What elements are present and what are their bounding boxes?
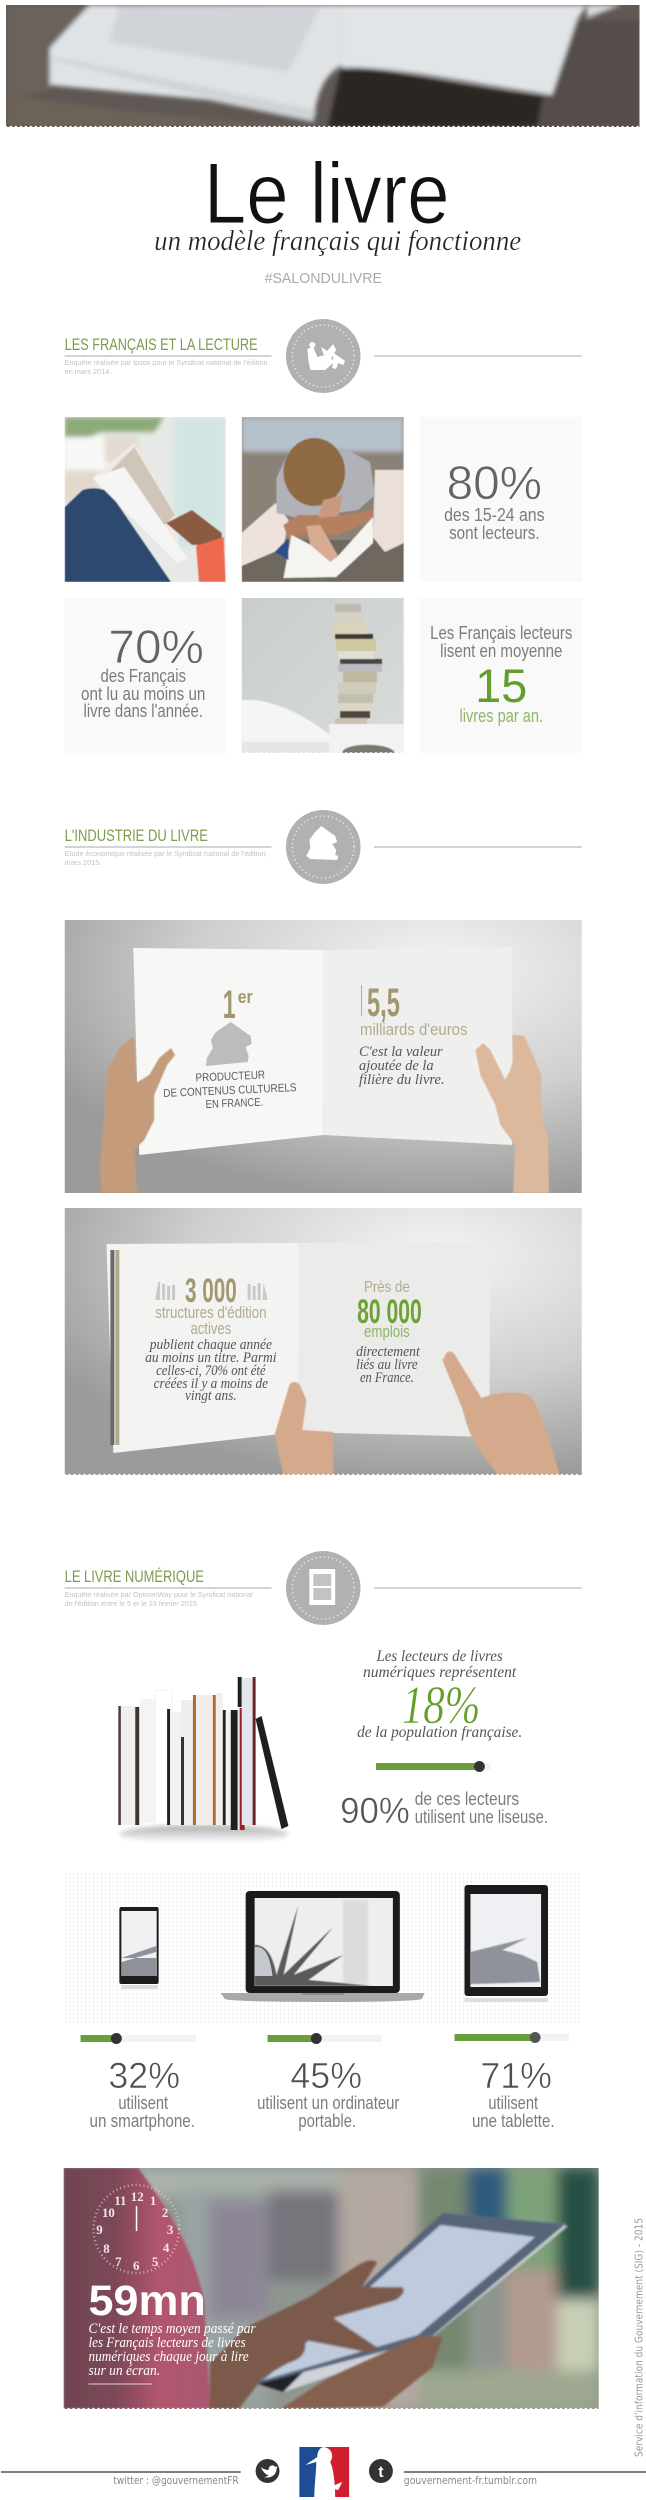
clock bbox=[93, 2185, 179, 2273]
stat: 1er: 1 bbox=[223, 983, 236, 1027]
stat panel: 70%: des Français bbox=[100, 666, 186, 686]
section heading: les Français et la lecture bbox=[65, 335, 582, 376]
text: 18% of French population: numériques représentent bbox=[363, 1664, 517, 1681]
stat: 3000 structures bbox=[155, 1282, 175, 1300]
clock: 9 bbox=[96, 2222, 103, 2237]
icon: tablet bbox=[464, 1885, 548, 2002]
stat panel: 70%: 70% bbox=[108, 621, 204, 673]
stat panel: 70%: livre dans l'année. bbox=[84, 701, 203, 721]
stat panel: 80% bbox=[420, 417, 582, 582]
section heading: l'industrie du livre: L'INDUSTRIE DU LIVRE bbox=[65, 826, 208, 845]
header photo: open book bbox=[6, 5, 640, 127]
photo: hands holding book, second spread: structures d'édition bbox=[155, 1303, 267, 1322]
panel: devices bbox=[65, 1873, 582, 2023]
clock: 5 bbox=[152, 2254, 158, 2269]
text: 90% use an e-reader: de ces lecteurs bbox=[415, 1789, 519, 1809]
bar and stat: 71% tablet: utilisent bbox=[488, 2093, 538, 2113]
footer: twitter bbox=[1, 2459, 279, 2487]
photo: hands holding book, second spread: actives bbox=[190, 1319, 231, 1338]
section heading: l'industrie du livre: mars 2015. bbox=[65, 858, 101, 867]
photo: hands on a tablet with 59mn callout bbox=[64, 2168, 599, 2409]
clock: 10 bbox=[102, 2205, 115, 2220]
section heading: le livre numérique: Enquête réalisée par OpinionWay pour le Syndicat national bbox=[65, 1590, 253, 1599]
section heading: l'industrie du livre: Etude économique réalisée par le Syndicat national de l'édition, bbox=[65, 849, 268, 858]
section heading: le livre numérique: de l'édition entre le 5 et le 23 février 2015. bbox=[65, 1599, 199, 1608]
bar and stat: 71% tablet: une tablette. bbox=[472, 2111, 554, 2131]
section heading: le livre numérique bbox=[65, 1567, 582, 1608]
footer: tumblr bbox=[369, 2459, 646, 2487]
icon: grey book stack bbox=[206, 1022, 252, 1066]
stat panel: 15 livres par an: 15 bbox=[475, 660, 527, 712]
title: Le livre bbox=[204, 146, 450, 242]
bar and stat: 45% laptop: 45% bbox=[290, 2056, 362, 2096]
bar and stat: 71% tablet bbox=[455, 2032, 569, 2131]
icon: smartphone bbox=[119, 1907, 159, 1989]
hands bbox=[99, 1035, 549, 1193]
photo: hands holding book, second spread: 80 000 bbox=[357, 1293, 422, 1331]
text: 18% of French population: 18% bbox=[402, 1675, 480, 1735]
bar and stat: 45% laptop: utilisent un ordinateur bbox=[257, 2093, 399, 2113]
photo: hands holding book, second spread: au moins un titre. Parmi bbox=[145, 1350, 277, 1366]
clock: 8 bbox=[103, 2241, 110, 2256]
icon: reader in armchair bbox=[286, 319, 361, 393]
bar and stat: 32% smartphone: 32% bbox=[108, 2056, 180, 2096]
image: row of books with an e-reader bbox=[118, 1677, 288, 1843]
stat panel: 80%: des 15-24 ans bbox=[444, 505, 545, 525]
right page bbox=[298, 1242, 490, 1437]
bar and stat: 45% laptop bbox=[257, 2033, 399, 2131]
section heading: l'industrie du livre bbox=[65, 826, 582, 867]
text: 18% of French population bbox=[357, 1648, 522, 1741]
photo: hands on a tablet with 59mn callout: sur un écran. bbox=[89, 2363, 160, 2379]
section heading: les Français et la lecture: Enquête réalisée par Ipsos pour le Syndicat national de l'édition bbox=[65, 358, 268, 367]
photo: hands holding book, first spread: er bbox=[238, 987, 253, 1007]
stat: 59mn: 59mn bbox=[89, 2277, 206, 2325]
photo: hands holding book, second spread: emplois bbox=[364, 1322, 410, 1341]
stat panel: 15 livres par an: Les Français lecteurs bbox=[430, 623, 572, 643]
stat panel: 15 livres par an bbox=[420, 598, 582, 753]
photo: hands holding book, first spread: PRODUCTEUR bbox=[195, 1069, 265, 1085]
text: 90% use an e-reader: 90% bbox=[340, 1791, 410, 1831]
photo: hands holding book, first spread: ajoutée de la bbox=[359, 1058, 434, 1074]
section heading: les Français et la lecture: LES FRANÇAIS ET LA LECTURE bbox=[65, 335, 258, 354]
clock: 1 bbox=[150, 2193, 156, 2208]
stat: 80 000 emplois: Près de bbox=[364, 1279, 410, 1296]
left page bbox=[106, 1243, 298, 1453]
subtitle: un modèle français qui fonctionne bbox=[154, 225, 521, 257]
text: 18% of French population: Les lecteurs de livres bbox=[375, 1648, 503, 1665]
stat: 5,5 milliards bbox=[361, 985, 362, 1016]
photo: hands holding book, second spread: vingt ans. bbox=[185, 1388, 237, 1404]
stat panel: 80%: 80% bbox=[447, 457, 542, 509]
hands bbox=[275, 1352, 560, 1475]
stat panel: 15 livres par an: livres par an. bbox=[460, 706, 543, 726]
vertical credit: Service d'information du Gouvernement (SIG) - 2015 bbox=[633, 2218, 646, 2457]
footer: tumblr: gouvernement-fr.tumblr.com bbox=[404, 2474, 537, 2487]
footer: tumblr: t bbox=[378, 2464, 384, 2481]
logo: République française bbox=[299, 2447, 349, 2497]
photo: hands holding book, second spread bbox=[65, 1208, 582, 1475]
photo: reader with book on knees bbox=[65, 417, 226, 582]
photo: hands holding book, second spread: 3 000 bbox=[185, 1272, 237, 1310]
photo: hands holding book, second spread: celles-ci, 70% ont été bbox=[156, 1363, 266, 1379]
photo: hands holding book, first spread: milliards d'euros bbox=[360, 1020, 467, 1039]
bar and stat: 32% smartphone: utilisent bbox=[118, 2093, 168, 2113]
hashtag: #SALONDULIVRE bbox=[265, 270, 382, 287]
photo: hands holding book, first spread: filière du livre. bbox=[359, 1072, 445, 1088]
photo: hands holding book, first spread: EN FRANCE. bbox=[205, 1097, 264, 1111]
progress bar: 90% bbox=[376, 1761, 490, 1772]
bar and stat: 32% smartphone bbox=[81, 2033, 196, 2131]
clock: 12 bbox=[131, 2189, 144, 2204]
clock: 4 bbox=[163, 2240, 170, 2255]
icon: stack of books bbox=[286, 810, 361, 884]
clock: 7 bbox=[115, 2254, 122, 2269]
photo: hands holding book, second spread: directement bbox=[356, 1344, 421, 1360]
photo: woman reading on the beach bbox=[242, 417, 404, 582]
photo: hands holding book, second spread: créées il y a moins de bbox=[154, 1376, 269, 1392]
photo: hands holding book, second spread: publient chaque année bbox=[149, 1337, 273, 1353]
clock: 6 bbox=[133, 2258, 140, 2273]
stat panel: 15 livres par an: lisent en moyenne bbox=[440, 641, 562, 661]
right page bbox=[323, 947, 512, 1145]
photo: hands on a tablet with 59mn callout: les Français lecteurs de livres bbox=[89, 2335, 246, 2351]
text: 90% use an e-reader: utilisent une liseuse. bbox=[415, 1807, 548, 1827]
text: 18% of French population: de la population française. bbox=[357, 1724, 522, 1741]
stat panel: 70%: ont lu au moins un bbox=[81, 684, 205, 704]
photo: hands holding book, first spread: 5,5 bbox=[367, 981, 400, 1025]
bar and stat: 45% laptop: portable. bbox=[298, 2111, 356, 2131]
clock: 11 bbox=[114, 2193, 126, 2208]
icon: laptop bbox=[221, 1891, 425, 2002]
clock: 3 bbox=[167, 2222, 174, 2237]
stat panel: 80%: sont lecteurs. bbox=[449, 523, 540, 543]
footer: twitter: twitter : @gouvernementFR bbox=[113, 2474, 239, 2487]
stat panel: 70% bbox=[65, 598, 226, 753]
photo: hands holding book, second spread: en France. bbox=[360, 1370, 414, 1386]
photo: hands holding book, first spread: DE CONTENUS CULTURELS bbox=[163, 1082, 297, 1100]
photo: hands holding book, second spread: liés au livre bbox=[356, 1357, 418, 1373]
left page bbox=[133, 948, 323, 1155]
section heading: le livre numérique: LE LIVRE NUMÉRIQUE bbox=[65, 1567, 204, 1586]
photo: hands holding book, first spread bbox=[65, 920, 582, 1193]
text: 90% use an e-reader bbox=[340, 1789, 548, 1831]
bar and stat: 71% tablet: 71% bbox=[480, 2056, 552, 2096]
icon: e-reader bbox=[286, 1551, 361, 1625]
photo: hands on a tablet with 59mn callout: numériques chaque jour à lire bbox=[89, 2349, 249, 2365]
bar and stat: 32% smartphone: un smartphone. bbox=[90, 2111, 195, 2131]
photo: hands on a tablet with 59mn callout: C'est le temps moyen passé par bbox=[89, 2321, 256, 2337]
photo: hands holding book, first spread: C'est la valeur bbox=[359, 1044, 443, 1060]
section heading: les Français et la lecture: en mars 2014. bbox=[65, 367, 111, 376]
photo: stack of books by the bed bbox=[242, 598, 404, 753]
clock: 2 bbox=[162, 2205, 168, 2220]
